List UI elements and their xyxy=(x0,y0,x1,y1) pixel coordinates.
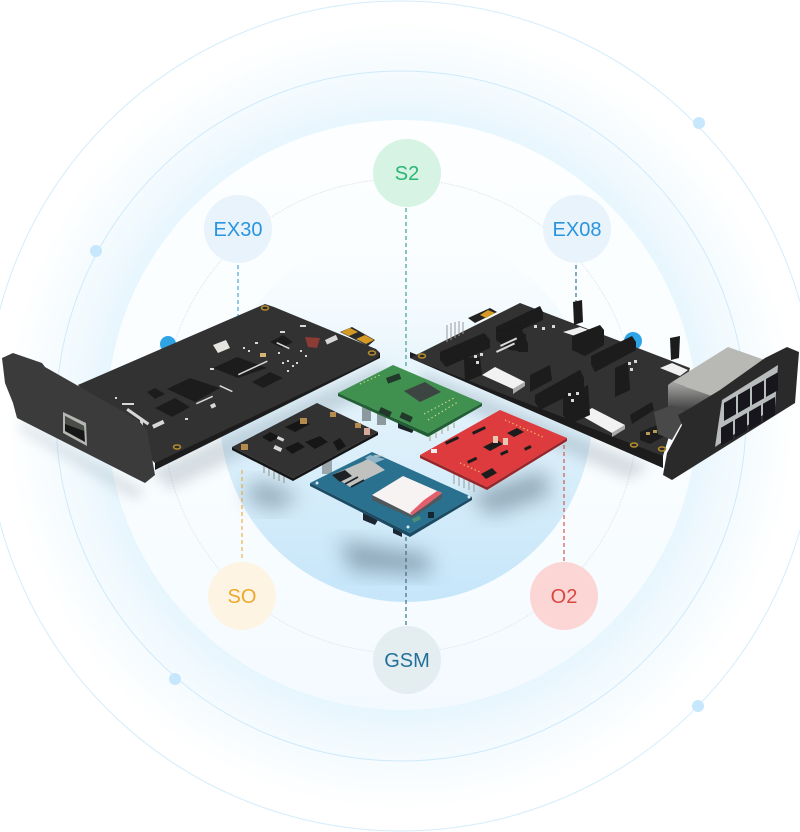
SO parts xyxy=(262,420,346,454)
O2 solder pads xyxy=(460,420,545,472)
label: EX30 xyxy=(204,195,272,263)
GSM under connectors xyxy=(363,513,402,537)
EX30 white connector xyxy=(213,340,230,353)
orbit dots xyxy=(90,117,705,712)
EX08 metal RJ45 cage xyxy=(654,347,765,440)
S2 CPU xyxy=(404,382,441,402)
module: O2 red xyxy=(420,410,567,492)
label: EX08 xyxy=(543,195,611,263)
EX30 ethernet port xyxy=(63,412,87,446)
EX08 board edge xyxy=(410,352,663,468)
label: GSM xyxy=(373,626,441,694)
GSM SIM socket xyxy=(332,455,385,487)
label: SO xyxy=(208,562,276,630)
blue dots behind boards xyxy=(160,332,642,352)
EX30 bracket panel xyxy=(2,353,155,483)
EX08 board top xyxy=(410,303,690,456)
label: O2: O2 xyxy=(551,586,577,608)
S2 under connector xyxy=(398,420,415,433)
O2 edge xyxy=(420,438,567,490)
label: EX08: EX08 xyxy=(553,219,601,241)
label: EX30: EX30 xyxy=(214,219,262,241)
EX30 chips xyxy=(147,335,293,417)
label: GSM: GSM xyxy=(384,650,430,672)
GSM top xyxy=(310,452,472,533)
SO standoff xyxy=(322,460,332,474)
label: S2 xyxy=(373,139,441,207)
S2 top xyxy=(338,365,482,433)
S2 solder pads xyxy=(360,375,458,420)
O2 light parts xyxy=(431,436,508,453)
EX08 black socket connectors xyxy=(440,306,665,444)
board shadows xyxy=(20,365,650,575)
board: EX30 card xyxy=(2,304,380,483)
EX08 pin header xyxy=(447,321,463,342)
S2 parts xyxy=(378,373,413,423)
SO coloured caps xyxy=(241,412,370,452)
label: S2: S2 xyxy=(395,163,419,185)
EX08 small parts xyxy=(474,325,657,435)
EX08 bracket panel xyxy=(663,347,799,480)
EX30 red component xyxy=(305,337,320,348)
S2 edge xyxy=(338,393,482,437)
dashed connector lines xyxy=(238,208,576,625)
O2 parts xyxy=(445,426,532,479)
EX30 mounting holes xyxy=(174,306,376,449)
SO pins xyxy=(264,466,284,483)
SO edge xyxy=(232,432,378,481)
label: SO: SO xyxy=(228,586,256,608)
GSM edge xyxy=(310,483,472,537)
S2 standoffs xyxy=(362,405,386,425)
module: SO black xyxy=(232,403,378,483)
EX30 gold finger connector xyxy=(340,327,375,346)
GSM small parts xyxy=(412,512,434,523)
module: S2 green xyxy=(338,365,482,441)
module: GSM blue xyxy=(310,452,472,537)
board: EX08 card xyxy=(410,300,799,480)
EX30 small parts xyxy=(115,325,338,429)
GSM module can xyxy=(372,476,442,518)
EX08 gold finger connector xyxy=(468,308,497,323)
EX30 board edge xyxy=(78,306,380,470)
EX08 white ribbon blocks xyxy=(482,327,688,437)
O2 pins xyxy=(454,473,474,492)
SO top xyxy=(232,403,378,478)
EX08 mounting holes xyxy=(418,354,666,451)
EX30 board top xyxy=(78,304,380,463)
S2 pins xyxy=(430,423,454,441)
label: O2 xyxy=(530,562,598,630)
O2 top xyxy=(420,410,567,487)
EX08 upright clips xyxy=(573,300,680,360)
EX08 RJ45 port block xyxy=(715,365,778,447)
